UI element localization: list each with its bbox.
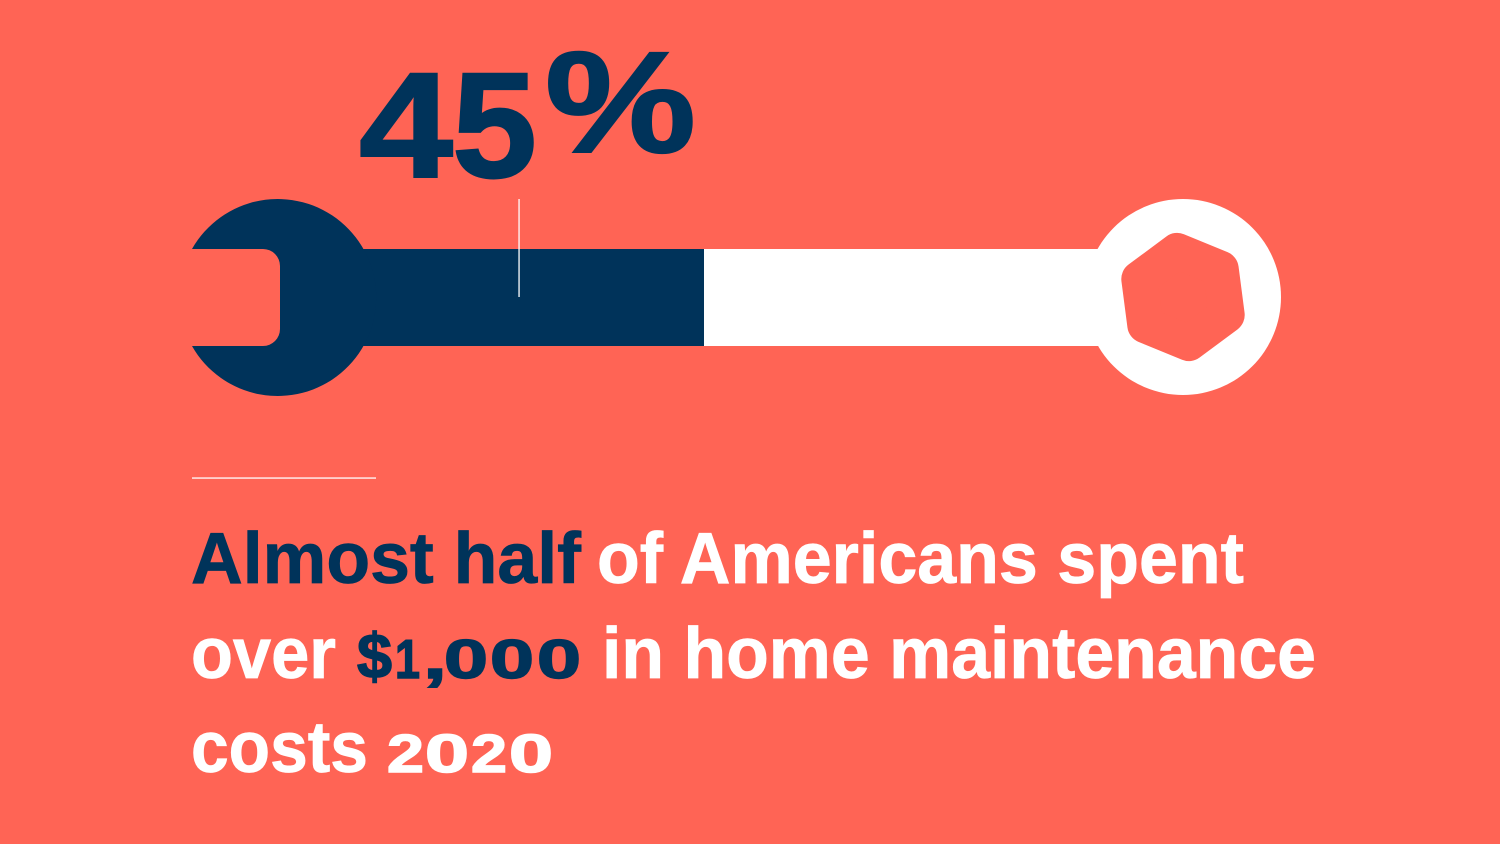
amount: $1,000: 0 bbox=[537, 628, 581, 690]
amount: $1,000: 0 bbox=[490, 628, 534, 690]
year: 2020 bbox=[387, 724, 553, 784]
wrench handle: navy 45% fill bbox=[340, 249, 704, 346]
wrench handle: white remainder bbox=[704, 249, 1114, 346]
year: 2020: 2 bbox=[387, 724, 424, 784]
wrench progress graphic bbox=[192, 199, 1281, 396]
wrench ring end bbox=[1085, 199, 1281, 395]
amount: $1,000: $ bbox=[357, 622, 392, 692]
headline text bbox=[191, 519, 1316, 788]
big statistic: 45%: % bbox=[545, 22, 696, 183]
headline text: of Americans spent bbox=[597, 519, 1244, 599]
pointer line from statistic to wrench bbox=[518, 199, 520, 297]
amount: $1,000: 1 bbox=[395, 628, 420, 690]
headline text: in home maintenance bbox=[602, 614, 1316, 694]
headline text: Almost half bbox=[191, 519, 582, 599]
year: 2020: 2 bbox=[471, 724, 507, 784]
big statistic: 45%: 4 bbox=[359, 41, 453, 209]
year: 2020: 0 bbox=[425, 724, 469, 784]
amount: $1,000 bbox=[357, 622, 581, 692]
amount: $1,000: 0 bbox=[444, 628, 488, 690]
big statistic: 45% bbox=[359, 22, 696, 209]
divider rule bbox=[192, 477, 376, 479]
wrench open jaw end bbox=[192, 199, 376, 396]
headline text: over bbox=[191, 614, 336, 694]
year: 2020: 0 bbox=[509, 724, 553, 784]
headline text: costs bbox=[191, 708, 368, 788]
amount: $1,000: , bbox=[423, 624, 447, 691]
hexagonal hole bbox=[1139, 251, 1227, 343]
big statistic: 45%: 5 bbox=[452, 41, 537, 209]
